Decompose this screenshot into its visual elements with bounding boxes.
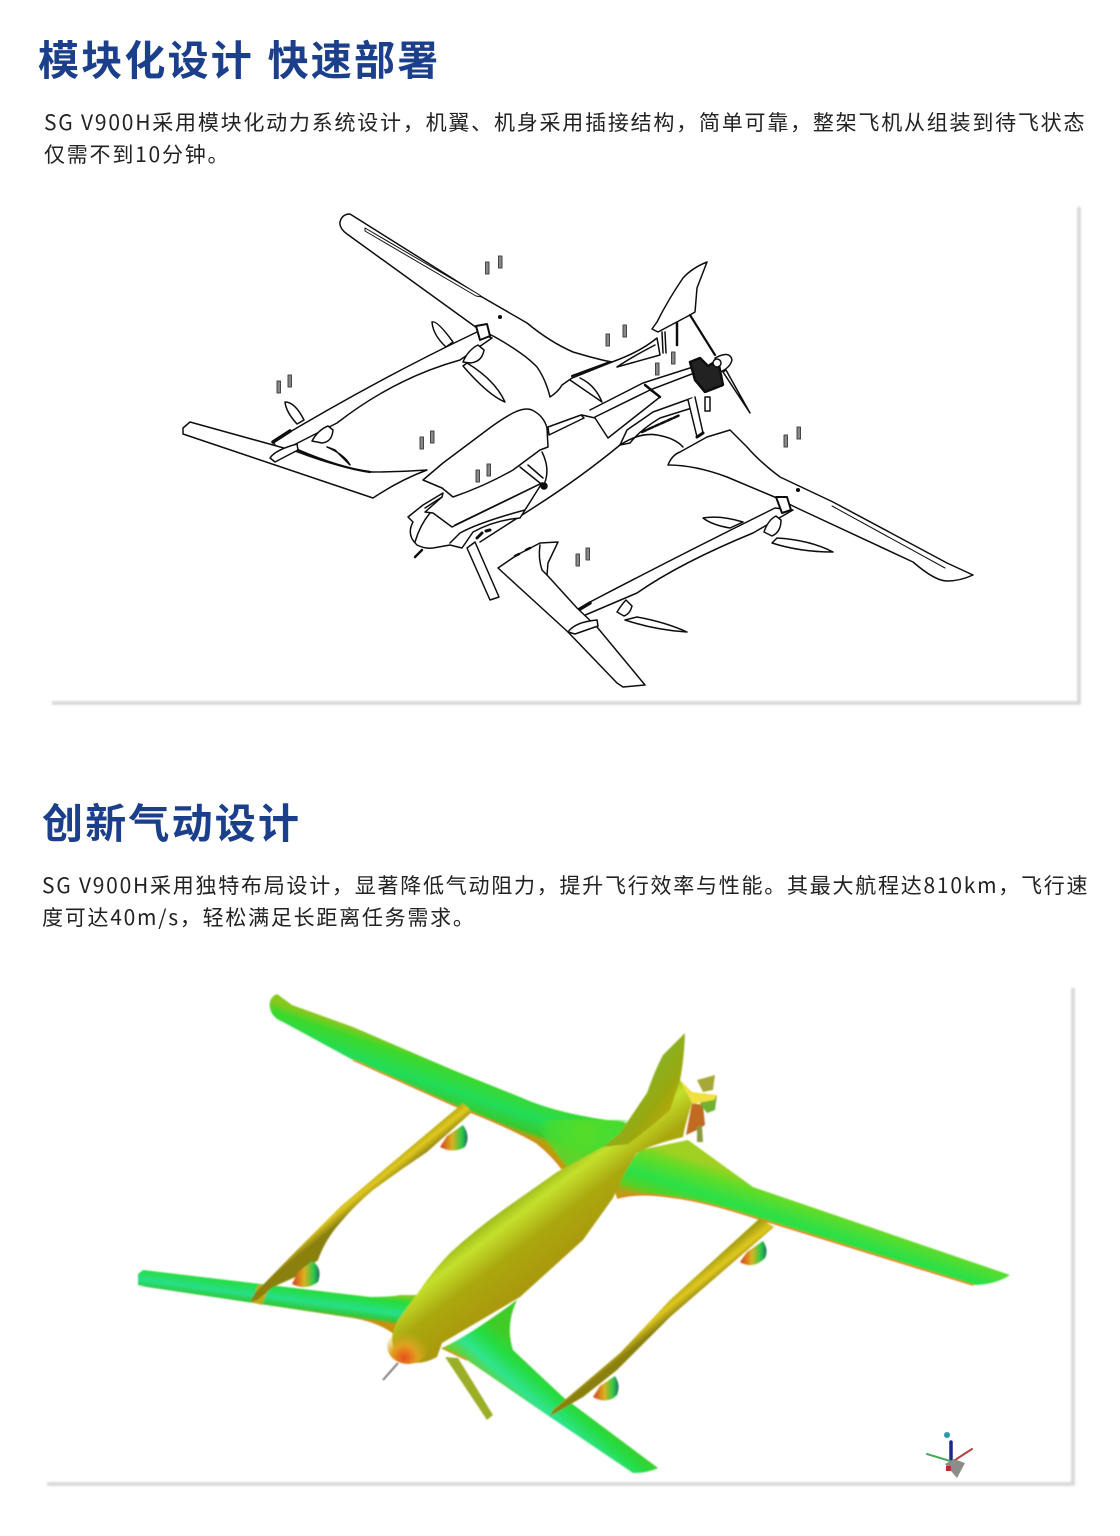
heading: aerodynamic design: 创新气动设计	[42, 801, 301, 847]
rear-left wing	[340, 214, 660, 402]
left boom	[250, 1103, 472, 1302]
right wing	[612, 1140, 1010, 1285]
fuselage and tail boom	[392, 1080, 692, 1363]
tail boom	[548, 415, 584, 435]
tail fin	[603, 1033, 685, 1147]
icon: axis triad	[927, 1432, 972, 1478]
front fuselage and nose	[408, 483, 542, 600]
text block: modular design description	[44, 107, 1086, 169]
text block: modular design description: SG V900H采用模块化动力系统设计，机翼、机身采用插接结构，简单可靠，整架飞机从组装到待飞状态	[44, 107, 1086, 137]
nose probe	[383, 1363, 398, 1380]
tail fin and rear propeller	[652, 262, 750, 413]
right boom and propellers	[573, 497, 833, 632]
panel: exploded line drawing of the aircraft	[51, 206, 1082, 706]
fuselage nose tip	[387, 1328, 429, 1364]
connector pins	[277, 256, 800, 566]
text block: aerodynamic design description	[42, 870, 1089, 932]
front-right wing	[442, 1300, 658, 1473]
rear-right wing	[668, 430, 973, 581]
text block: aerodynamic design description: SG V900H采用独特布局设计，显著降低气动阻力，提升飞行效率与性能。其最大航程达810km，飞行速	[42, 870, 1089, 900]
text block: modular design description: 仅需不到10分钟。	[44, 139, 230, 169]
right boom	[550, 1218, 774, 1416]
rear-left wing	[270, 994, 640, 1170]
left rear boom and propellers	[273, 322, 505, 465]
rear propeller and nacelle	[680, 1075, 717, 1142]
text block: aerodynamic design description: 度可达40m/s，轻松满足长距离任务需求。	[42, 902, 476, 932]
front-left wing	[183, 422, 427, 498]
top hatch	[423, 409, 548, 497]
nose gear	[445, 1357, 493, 1420]
front-left wing	[138, 1270, 425, 1335]
rear centre fuselage	[480, 367, 703, 542]
front-right wing	[498, 542, 645, 687]
heading: modular design: 模块化设计 快速部署	[38, 38, 440, 84]
